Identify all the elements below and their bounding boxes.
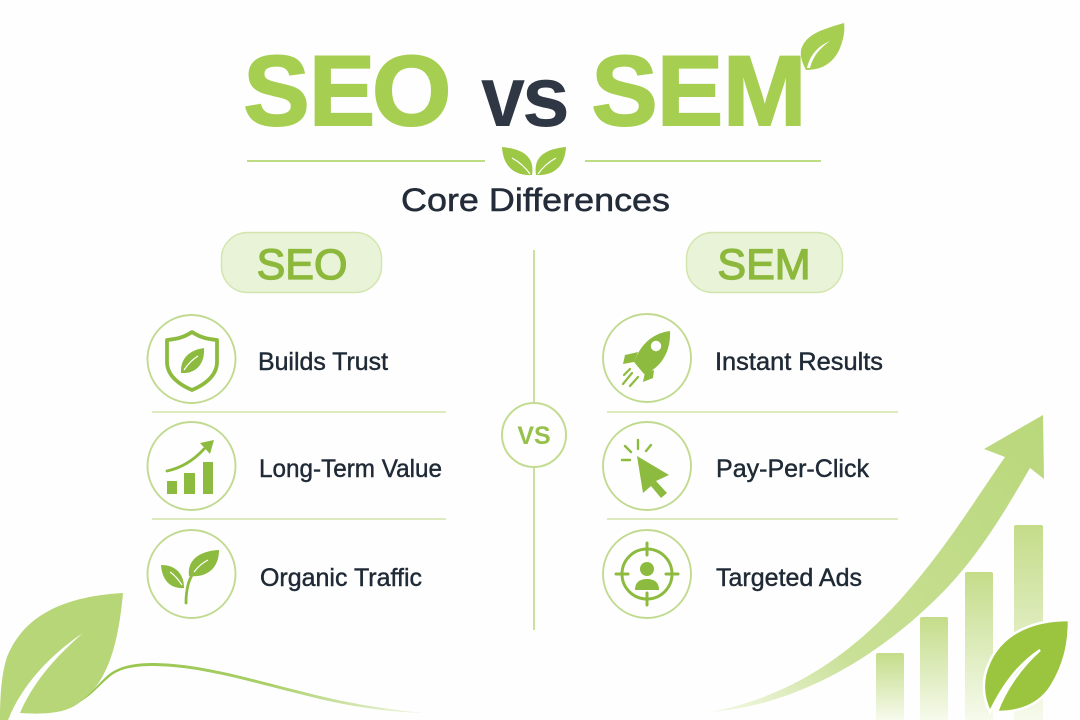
title word: vs: v — [481, 48, 525, 145]
title word: vs: s — [522, 49, 570, 145]
icon: sprout — [161, 550, 219, 603]
item: Organic Traffic — [148, 530, 422, 618]
item: Long-Term Value — [148, 422, 442, 510]
panel: SEM list — [603, 314, 898, 618]
title word: SEO: S — [244, 35, 310, 146]
icon: target person — [616, 543, 678, 605]
item: Organic Traffic: Organic Traffic — [260, 564, 422, 592]
subtitle: Core Differences — [401, 182, 670, 218]
decoration: bottom-left leaf and stem — [0, 593, 425, 720]
vs badge: VS — [517, 422, 551, 450]
icon: rocket — [623, 331, 670, 386]
item: Builds Trust: Builds Trust — [258, 348, 388, 376]
item: Instant Results: Instant Results — [715, 348, 883, 376]
item: Builds Trust — [148, 315, 388, 403]
item: Pay-Per-Click: Pay-Per-Click — [716, 455, 869, 483]
icon: shield with leaf — [167, 332, 217, 390]
header pill: SEM — [686, 232, 842, 292]
item: Targeted Ads: Targeted Ads — [716, 564, 862, 592]
vs badge — [502, 403, 566, 467]
title word: vs — [481, 48, 570, 145]
header pill: SEM: SEM — [717, 241, 811, 289]
item: Pay-Per-Click — [603, 422, 869, 510]
decoration: growth arrow — [710, 415, 1044, 712]
center divider — [502, 250, 566, 630]
title divider with leaves — [247, 147, 821, 175]
header pill: SEO — [222, 232, 382, 292]
title word: SEM: E — [657, 35, 723, 146]
title word: SEO: O — [372, 36, 451, 147]
title — [244, 23, 844, 147]
item: Long-Term Value: Long-Term Value — [259, 455, 442, 483]
title word: SEO — [244, 35, 451, 147]
title word: SEM — [592, 35, 806, 147]
item: Instant Results — [603, 314, 883, 402]
header pill: SEO: SEO — [257, 241, 347, 289]
title word: SEM: M — [723, 36, 806, 147]
title word: SEO: E — [309, 35, 375, 146]
icon: cursor click — [622, 440, 669, 498]
icon: title leaf — [801, 23, 844, 70]
decoration: bottom-right leaf — [984, 620, 1069, 712]
icon: twin leaves — [502, 147, 566, 175]
title word: SEM: S — [592, 35, 658, 146]
panel: SEO list — [148, 315, 446, 618]
decoration: growth bars — [876, 525, 1043, 720]
item: Targeted Ads — [603, 530, 862, 618]
icon: growth chart — [167, 440, 214, 494]
